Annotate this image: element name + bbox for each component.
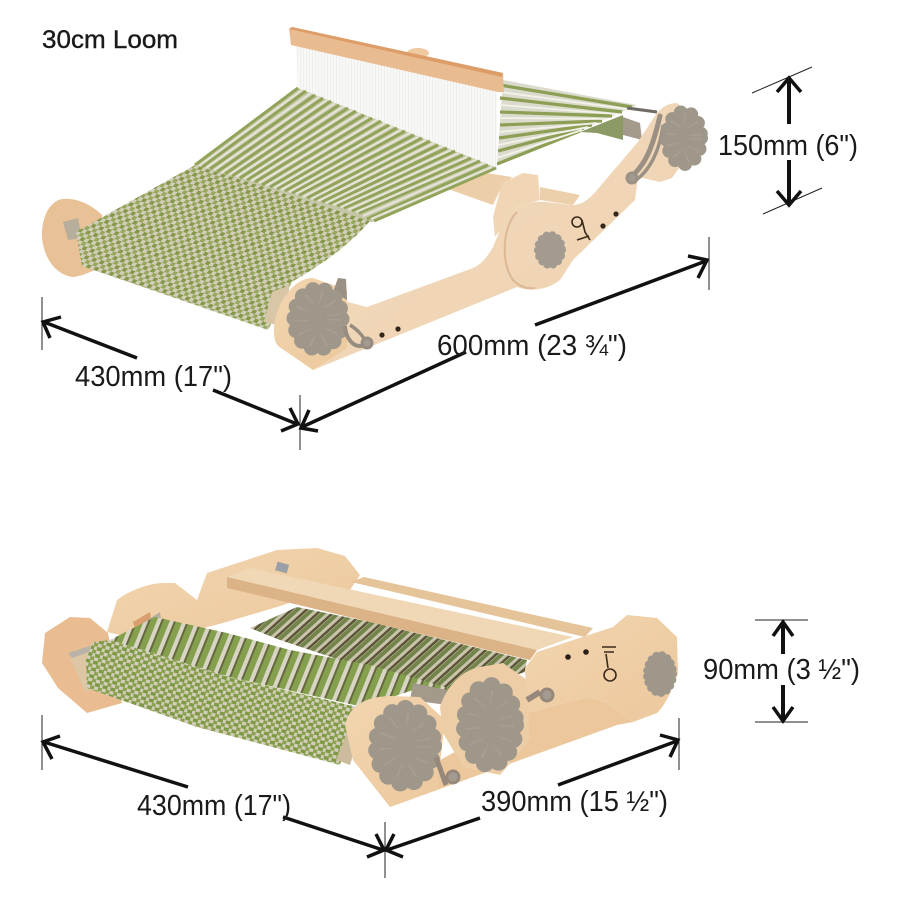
back tension link xyxy=(627,116,663,183)
maker logo xyxy=(572,217,590,240)
cloth beam lettering patch xyxy=(264,285,290,326)
pivot blob shading xyxy=(505,212,535,288)
roller bracket xyxy=(68,646,92,658)
knob two xyxy=(465,686,515,764)
back support bar xyxy=(351,577,593,637)
warp underlay xyxy=(195,88,497,222)
dimension: height 150mm xyxy=(718,67,858,214)
back roller axle xyxy=(627,108,657,112)
upper pawl link xyxy=(527,689,553,701)
front left disc xyxy=(42,617,122,713)
back warp threads xyxy=(497,80,637,165)
roller core xyxy=(68,645,100,692)
woven cloth roller xyxy=(86,640,357,765)
front pawl link xyxy=(345,325,372,348)
side frame upper plate xyxy=(525,615,678,722)
axle xyxy=(133,612,153,640)
top folded bar xyxy=(227,568,573,660)
side frame lower plank xyxy=(390,697,633,807)
woven fabric xyxy=(76,165,370,330)
dimension: length 600mm xyxy=(301,237,709,431)
warp roll bracket xyxy=(140,612,165,650)
back roller bracket xyxy=(623,117,642,140)
back roller xyxy=(580,115,623,140)
frame holes xyxy=(565,649,589,660)
heddle peg xyxy=(407,48,429,58)
heddle top bar xyxy=(289,27,504,92)
dimension: folded height 90mm: 90mm (3 ½") xyxy=(703,654,860,686)
front warp threads xyxy=(195,88,496,221)
dimension: height 150mm: 150mm (6") xyxy=(718,130,858,162)
pivot knob xyxy=(647,655,673,693)
grey bracket by warp roll xyxy=(410,683,447,705)
dimension: folded height 90mm xyxy=(703,620,860,722)
dimension: length 600mm: 600mm (23 ¾") xyxy=(437,330,627,362)
rear frame bolt xyxy=(275,562,289,573)
rear frame side xyxy=(107,548,360,642)
cloth beam lettering patch xyxy=(336,708,366,765)
cross support bar xyxy=(445,172,512,205)
left side disc xyxy=(42,199,106,277)
dimension: depth 430mm: 430mm (17") xyxy=(75,361,232,393)
dimension: folded width 390mm xyxy=(386,718,679,857)
frame holes xyxy=(379,211,619,338)
front knob tab xyxy=(333,278,347,300)
warp roll far xyxy=(250,607,527,695)
lower pawl link xyxy=(436,757,459,785)
front wood disc xyxy=(274,278,347,370)
first wood disc xyxy=(345,696,445,807)
dimension: depth 430mm xyxy=(42,297,300,450)
dimension: folded depth 430mm: 430mm (17") xyxy=(137,790,291,822)
upright support xyxy=(493,173,540,237)
back ratchet knob xyxy=(667,112,701,164)
title: 30cm Loom xyxy=(42,26,178,54)
left roller end xyxy=(63,218,82,240)
near side frame arm xyxy=(300,103,692,370)
rear frame rail xyxy=(540,187,580,205)
dimension: folded width 390mm: 390mm (15 ½") xyxy=(481,786,668,818)
maker logo xyxy=(602,647,616,681)
illustration: assembled 30cm loom xyxy=(42,27,701,370)
front ratchet knob xyxy=(294,290,342,348)
heddle xyxy=(296,44,497,168)
pivot knob xyxy=(538,235,562,265)
dimension: folded depth 430mm xyxy=(42,715,385,878)
knob one xyxy=(377,709,433,783)
second wood disc xyxy=(440,663,530,775)
warp roll near xyxy=(110,617,455,707)
illustration: folded loom xyxy=(42,548,678,807)
